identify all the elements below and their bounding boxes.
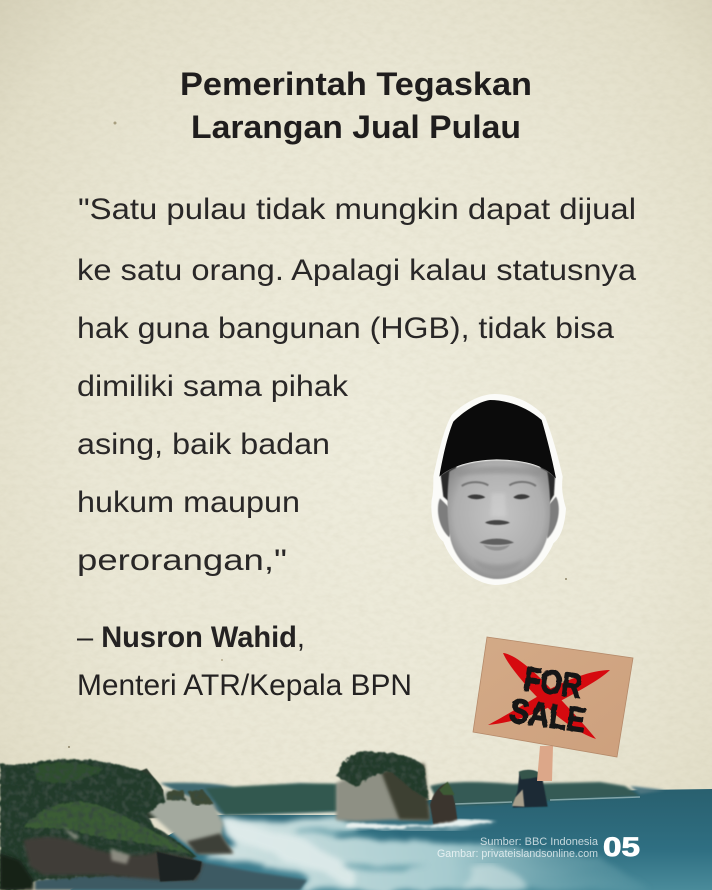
quote text: asing, baik badan: [77, 428, 330, 461]
attribution: – Nusron Wahid,: [77, 621, 305, 654]
quote text: hak guna bangunan (HGB), tidak bisa: [77, 312, 614, 345]
attribution: [77, 621, 412, 702]
for sale lettering: [508, 660, 588, 740]
sticker outline: [431, 394, 566, 585]
surf band: [205, 818, 650, 890]
dark wet sand: [35, 862, 307, 890]
for sale lettering: SALE: [508, 692, 588, 740]
sign post: [537, 746, 553, 781]
quote text: dimiliki sama pihak: [77, 370, 349, 403]
facial shading: [457, 466, 542, 572]
peci cap: [439, 400, 556, 478]
back grey cliff: [0, 759, 233, 890]
page number: 05: [603, 832, 640, 862]
coastal photo strip: [0, 751, 712, 890]
quote text: "Satu pulau tidak mungkin dapat dijual: [78, 193, 636, 226]
cardboard: [473, 637, 633, 757]
title: Larangan Jual Pulau: [191, 109, 521, 145]
title: [180, 66, 532, 145]
quote text: hukum maupun: [77, 486, 300, 519]
main green headland: [0, 759, 197, 890]
quote text: [77, 193, 636, 577]
facial features: [462, 482, 536, 551]
rock faces: [23, 837, 203, 880]
attribution: Menteri ATR/Kepala BPN: [77, 669, 412, 702]
source credit: Sumber: BBC Indonesia: [480, 836, 599, 848]
quote text: ke satu orang. Apalagi kalau statusnya: [77, 254, 636, 287]
sea: [70, 789, 712, 890]
distant hills: [160, 782, 665, 816]
surf at base: [346, 819, 496, 829]
for sale sign: [473, 637, 633, 781]
red cross: [503, 653, 596, 739]
quote text: perorangan,": [77, 544, 287, 577]
face: [447, 460, 550, 579]
teal streaks in surf: [290, 828, 430, 872]
central sea stack: [336, 751, 548, 829]
portrait sticker: Nusron Wahid: [431, 394, 566, 585]
source credit: [437, 836, 599, 860]
title: Pemerintah Tegaskan: [180, 66, 532, 102]
far sea stack: [513, 770, 548, 808]
source credit: Gambar: privateislandsonline.com: [437, 848, 598, 860]
hair sides: [441, 465, 555, 506]
for sale lettering: FOR: [521, 660, 584, 706]
shoreline foam far: [455, 797, 640, 804]
ears: [438, 497, 559, 539]
